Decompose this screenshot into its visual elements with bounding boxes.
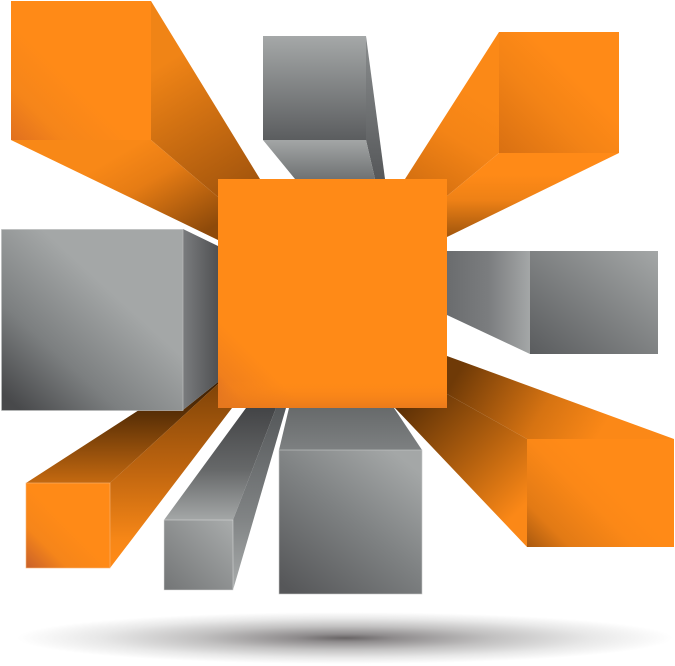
block: left grey [2,229,218,410]
block: top-left orange [11,1,260,240]
block: right grey [447,251,658,354]
block: top-right orange [405,32,619,237]
block: bottom-right orange [395,356,674,547]
block: bottom small grey [164,408,286,590]
block: bottom-center grey [279,408,422,594]
block: top-center grey [263,36,385,179]
central orange square [218,179,447,408]
block: bottom-left orange [26,382,232,568]
ground shadow [17,612,673,664]
